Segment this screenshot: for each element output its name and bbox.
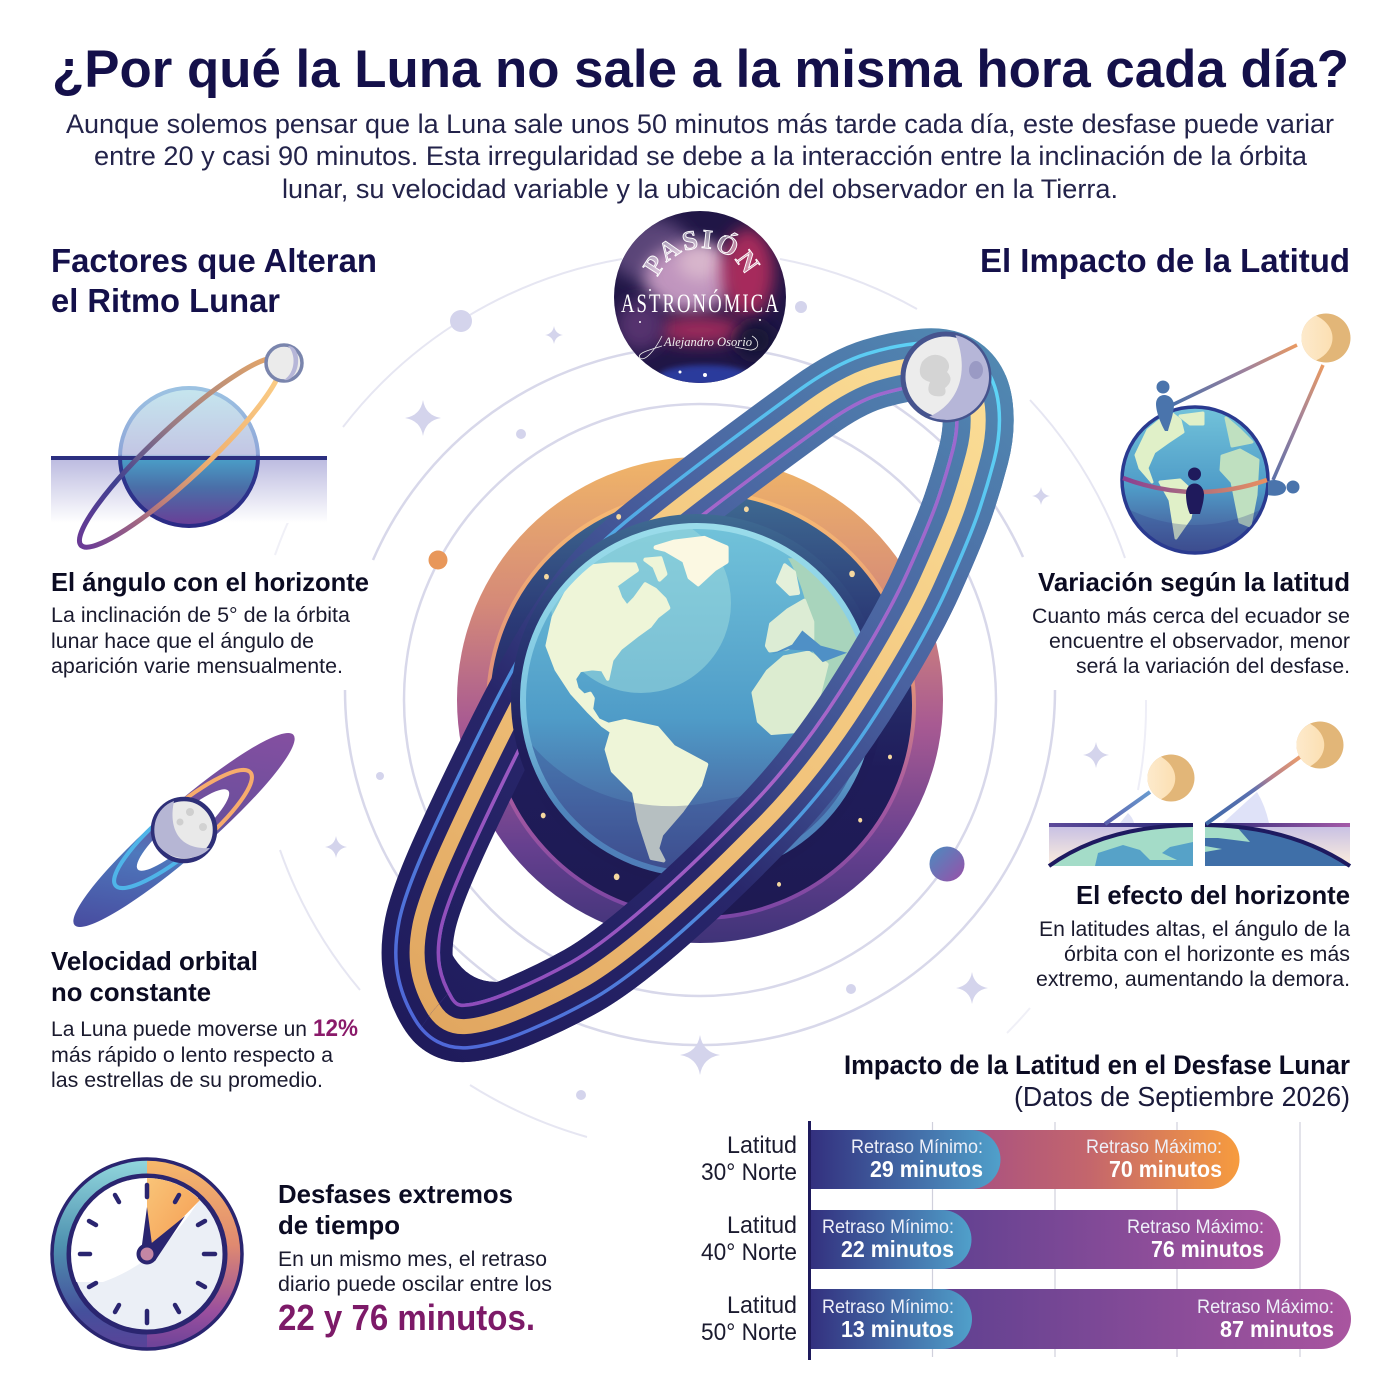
text: variación según la latitud: Cuanto más cerca del ecuador se: [1032, 604, 1350, 628]
text: velocidad orbital: [51, 946, 358, 1092]
mediterranean sea: [772, 631, 847, 662]
title: ¿Por qué la Luna no sale a la misma hora cada día?: [52, 40, 1349, 99]
row labels: 50° Norte: [701, 1319, 797, 1346]
text: velocidad orbital: Velocidad orbital: [51, 946, 258, 976]
sight lines: [1172, 345, 1297, 405]
intro text: entre 20 y casi 90 minutos. Esta irregularidad se debe a la interacción entre la inclinación de la órbita: [94, 141, 1308, 171]
Earth rim: [523, 526, 871, 874]
bar: 40° Norte: 76 minutos: [1151, 1236, 1264, 1262]
icon: velocidad orbital: [58, 716, 310, 944]
bar: 50° Norte: Retraso Mínimo:: [822, 1297, 954, 1318]
bar: 30° Norte: 70 minutos: [1109, 1156, 1222, 1182]
text: desfases extremos: Desfases extremos: [278, 1179, 513, 1209]
icon: purple small planet: [930, 846, 964, 882]
bar: 40° Norte: [809, 1210, 1280, 1269]
icon: efecto del horizonte: [1049, 722, 1350, 866]
text: ángulo con el horizonte: La inclinación de 5° de la órbita: [51, 603, 350, 627]
central illustration: Earth and lunar orbit: [417, 334, 1000, 1027]
text: efecto del horizonte: órbita con el horizonte es más: [1064, 942, 1350, 966]
bar: 50° Norte: 87 minutos: [1220, 1316, 1334, 1342]
text: efecto del horizonte: En latitudes altas, el ángulo de la: [1039, 917, 1350, 941]
orbit band front half: [417, 364, 978, 1027]
chart heading: [844, 1050, 1350, 1112]
text: ángulo con el horizonte: El ángulo con el horizonte: [51, 567, 369, 597]
observers: [1156, 380, 1300, 514]
heading: factores: el Ritmo Lunar: [51, 282, 280, 319]
text: desfases extremos: En un mismo mes, el retraso: [278, 1247, 547, 1271]
heading: factores: [51, 242, 377, 319]
row labels: Latitud: [727, 1132, 797, 1159]
logo: Pasión Astronómica: [614, 211, 786, 383]
bar chart: latitud: [701, 1121, 1351, 1360]
text: efecto del horizonte: [1036, 880, 1350, 991]
inner dark disc: [488, 492, 914, 918]
icon: ángulo con el horizonte: [51, 341, 327, 564]
Moon on orbit: [903, 334, 1000, 425]
text: velocidad orbital: más rápido o lento respecto a: [51, 1043, 333, 1067]
outer disc: [457, 457, 943, 943]
logo: Pasión Astronómica: ASTRONÓMICA: [621, 288, 779, 318]
intro text: [66, 109, 1334, 204]
icon: variación según la latitud: [1122, 314, 1350, 555]
heading: impacto latitud: El Impacto de la Latitud: [980, 242, 1350, 279]
text: efecto del horizonte: El efecto del horizonte: [1076, 880, 1350, 910]
bar: 30° Norte: [809, 1130, 1240, 1189]
lower shade: [532, 745, 849, 862]
text: desfases extremos: de tiempo: [278, 1210, 400, 1240]
row labels: 40° Norte: [701, 1239, 797, 1266]
row labels: [701, 1132, 797, 1346]
low latitude panel: [1049, 754, 1194, 866]
row labels: 30° Norte: [701, 1159, 797, 1186]
chart heading: Impacto de la Latitud en el Desfase Lunar: [844, 1050, 1350, 1080]
text: variación según la latitud: [1032, 567, 1350, 678]
orbit rings background: [275, 259, 1146, 1137]
eastern land tint: [788, 558, 856, 696]
bar: 30° Norte: 29 minutos: [870, 1156, 983, 1182]
chart heading: (Datos de Septiembre 2026): [1014, 1081, 1350, 1112]
bar: 30° Norte: Retraso Mínimo:: [851, 1137, 983, 1158]
row labels: Latitud: [727, 1212, 797, 1239]
icon: orange small planet: [428, 550, 448, 570]
text: efecto del horizonte: extremo, aumentando la demora.: [1036, 967, 1350, 991]
bar: 50° Norte: 13 minutos: [841, 1316, 954, 1342]
text: velocidad orbital: no constante: [51, 977, 211, 1007]
text: variación según la latitud: será la variación del desfase.: [1076, 654, 1350, 678]
high latitude panel: [1205, 722, 1350, 866]
peach moon: [1301, 314, 1350, 362]
text: ángulo con el horizonte: [51, 567, 369, 678]
small Earth: [1122, 407, 1268, 553]
bar: 40° Norte: 22 minutos: [841, 1236, 954, 1262]
bar: 50° Norte: [809, 1289, 1351, 1349]
bar: 30° Norte: Retraso Máximo:: [1086, 1137, 1222, 1158]
decorative dots and stars: [325, 301, 1109, 1100]
text: velocidad orbital: 12%: [313, 1015, 358, 1042]
text: velocidad orbital: La Luna puede moverse un: [51, 1017, 307, 1041]
text: ángulo con el horizonte: lunar hace que el ángulo de: [51, 629, 314, 653]
bar: 40° Norte: Retraso Máximo:: [1127, 1217, 1264, 1238]
row labels: Latitud: [727, 1292, 797, 1319]
bar: 40° Norte: Retraso Mínimo:: [822, 1217, 954, 1238]
text: ángulo con el horizonte: aparición varie mensualmente.: [51, 654, 343, 678]
continents: [547, 538, 827, 860]
halo behind Earth: [511, 514, 883, 886]
text: desfases extremos: 22 y 76 minutos.: [278, 1297, 535, 1338]
intro text: Aunque solemos pensar que la Luna sale unos 50 minutos más tarde cada día, este desfase puede variar: [66, 109, 1334, 139]
logo: Pasión Astronómica: Alejandro Osorio: [663, 334, 752, 349]
text: velocidad orbital: las estrellas de su promedio.: [51, 1068, 323, 1092]
text: desfases extremos: diario puede oscilar entre los: [278, 1272, 552, 1296]
bar: 50° Norte: Retraso Máximo:: [1197, 1297, 1334, 1318]
disc star dots: [541, 506, 892, 887]
intro text: lunar, su velocidad variable y la ubicación del observador en la Tierra.: [282, 174, 1118, 204]
text: variación según la latitud: encuentre el observador, menor: [1049, 629, 1350, 653]
orbit band back half: [417, 364, 978, 1027]
Earth globe: [526, 529, 856, 868]
logo: Pasión Astronómica: PASIÓN: [642, 230, 761, 277]
text: variación según la latitud: Variación según la latitud: [1038, 567, 1350, 597]
text: desfases extremos: [278, 1179, 552, 1338]
heading: factores: Factores que Alteran: [51, 242, 377, 279]
icon: clock: [51, 1158, 243, 1350]
